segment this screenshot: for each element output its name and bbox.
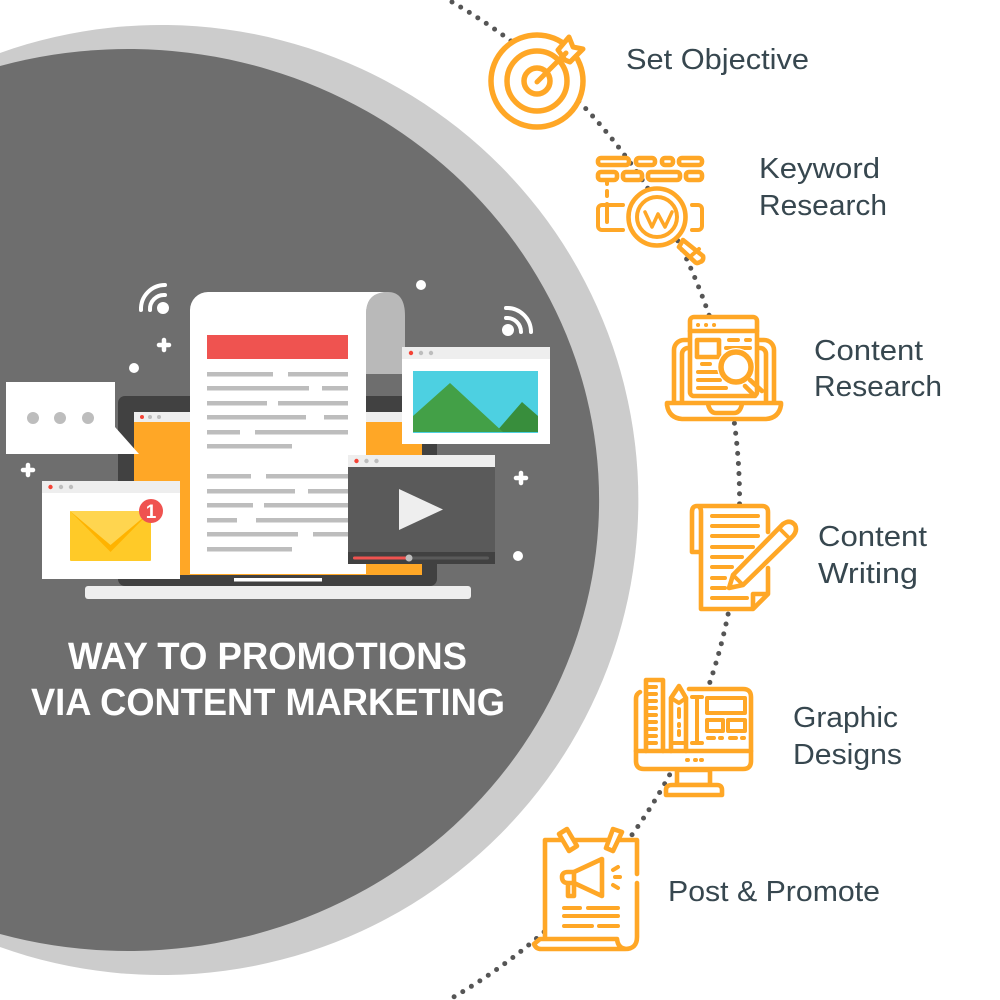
background ring	[0, 25, 638, 975]
label: post and promote: Post & Promote	[668, 876, 880, 908]
icon: content research laptop	[667, 317, 781, 419]
icon: keyword research	[598, 158, 703, 263]
label: graphic designs: Designs	[793, 739, 902, 771]
icon: target	[491, 35, 583, 127]
label: content writing: Content	[818, 521, 927, 553]
icon: graphic designs monitor	[636, 680, 752, 795]
dark main circle	[0, 49, 599, 951]
label: content research	[814, 335, 942, 403]
chat bubble	[6, 382, 139, 454]
label: content research: Content	[814, 335, 923, 367]
title: VIA CONTENT MARKETING	[31, 682, 505, 724]
laptop	[85, 396, 471, 599]
video window	[348, 455, 495, 564]
label: graphic designs: Graphic	[793, 702, 898, 734]
email window	[42, 481, 180, 579]
icon: content writing	[692, 506, 796, 609]
label: content writing: Writing	[818, 558, 918, 590]
wifi icon right	[502, 308, 531, 336]
label: keyword research: Keyword	[759, 153, 880, 185]
label: keyword research	[759, 153, 887, 222]
email window: 1	[146, 502, 157, 523]
wifi icon left	[141, 285, 169, 314]
image window	[402, 347, 550, 444]
title: WAY TO PROMOTIONS	[68, 636, 467, 678]
sparkles: plus signs and dots	[23, 280, 526, 561]
label: content research: Research	[814, 371, 942, 403]
label: content writing	[818, 521, 927, 590]
title	[31, 636, 505, 724]
document page	[190, 292, 405, 574]
label: set objective: Set Objective	[626, 44, 809, 76]
label: graphic designs	[793, 702, 902, 771]
label: keyword research: Research	[759, 190, 887, 222]
illustration: content marketing devices	[6, 280, 550, 599]
icon: post and promote	[534, 829, 637, 949]
dotted arc path	[452, 2, 740, 998]
